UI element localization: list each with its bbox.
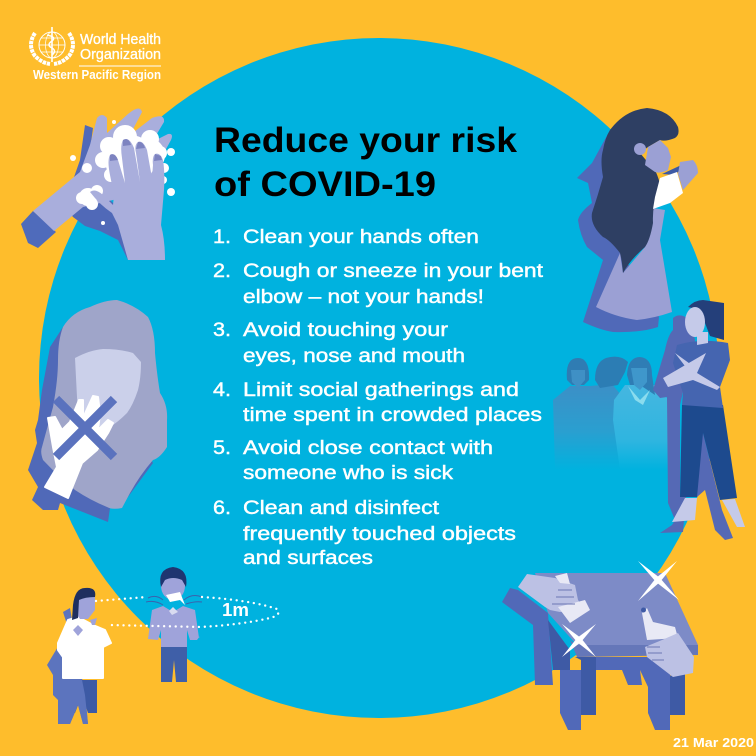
tip 5: 5. (213, 437, 231, 459)
icon: blue cross (56, 399, 114, 457)
table top (535, 573, 698, 645)
tip 2: Cough or sneeze in your bent (243, 260, 544, 282)
tip 4: Limit social gatherings and (243, 379, 519, 401)
list of six tips (213, 226, 544, 569)
tip 5: someone who is sick (243, 462, 453, 484)
tip 5: Avoid close contact with (243, 437, 493, 459)
tip 2 (213, 260, 544, 308)
tip 3: Avoid touching your (243, 319, 449, 341)
tip 6 (213, 497, 516, 569)
navy trousers (680, 405, 737, 500)
tip 6: 6. (213, 497, 231, 519)
title (214, 121, 518, 204)
hand with sponge (518, 573, 590, 623)
tip 2: 2. (213, 260, 231, 282)
WHO logo: Organization (80, 47, 161, 63)
region name: Western Pacific Region (33, 67, 161, 82)
illustration: washing hands (21, 108, 175, 260)
tip 2: elbow – not your hands! (243, 286, 484, 308)
tip 3: eyes, nose and mouth (243, 345, 465, 367)
sparkles (562, 561, 679, 657)
organisation name: World Health (80, 32, 161, 48)
table legs and shadow (502, 588, 553, 685)
illustration: cleaning a table (502, 561, 698, 730)
blue jumper (673, 341, 730, 408)
tip 6: Clean and disinfect (243, 497, 440, 519)
man sneezing into tissue (146, 567, 202, 682)
label 1m: 1m (222, 600, 249, 620)
illustration: crowded gathering and woman crossing arms (553, 300, 745, 540)
tip 5 (213, 437, 493, 484)
woman with white jumper (47, 588, 111, 724)
faded crowd (553, 357, 668, 470)
tip 6: frequently touched objects (243, 523, 516, 545)
tip 3 (213, 319, 465, 367)
head and neck (697, 332, 708, 345)
tip 1: Clean your hands often (243, 226, 479, 248)
illustration: 1 metre distance (47, 567, 278, 724)
tip 6: and surfaces (243, 547, 373, 569)
tip 4 (213, 379, 542, 426)
tip 4: 4. (213, 379, 231, 401)
illustration: cough into elbow (577, 108, 698, 332)
table edge (570, 640, 698, 657)
socks and feet (672, 498, 745, 527)
tip 3: 3. (213, 319, 231, 341)
tip 1: 1. (213, 226, 231, 248)
icon: WHO emblem (31, 27, 73, 64)
tip 4: time spent in crowded places (243, 404, 542, 426)
illustration: do not touch face (28, 300, 167, 522)
hair (688, 300, 724, 340)
WHO logo (31, 27, 161, 82)
date: 21 Mar 2020 (673, 735, 754, 750)
title: of COVID-19 (214, 165, 436, 204)
crossed arms (663, 353, 720, 390)
title: Reduce your risk (214, 121, 518, 160)
dotted distance ring (96, 597, 278, 627)
hand with spray bottle (641, 608, 694, 677)
woman shadow figure (653, 315, 733, 540)
